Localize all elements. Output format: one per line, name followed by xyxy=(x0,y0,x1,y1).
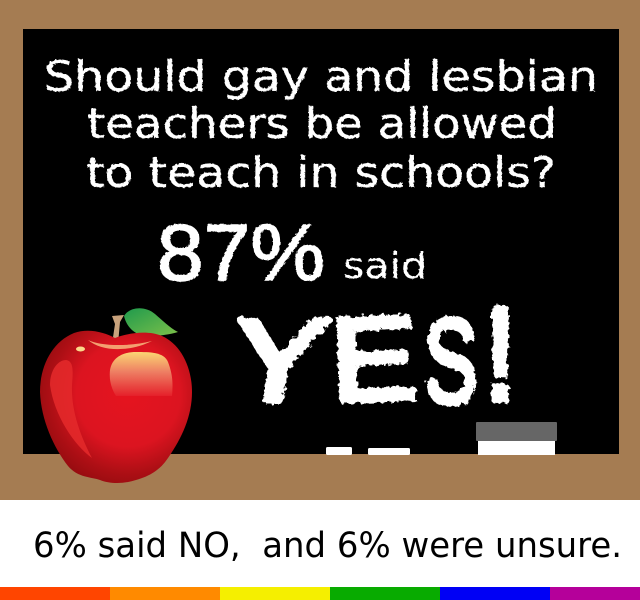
87% said: said xyxy=(343,246,427,287)
apple glossy reflection xyxy=(110,352,173,396)
question heading: to teach in schools? xyxy=(86,148,556,197)
chalkboard xyxy=(23,29,619,454)
eraser xyxy=(476,422,557,455)
apple body xyxy=(40,331,192,483)
YES!: ! xyxy=(484,281,517,428)
footer text: 6% said NO, and 6% were unsure. xyxy=(33,526,622,566)
YES!: S xyxy=(424,294,478,429)
bottom white band xyxy=(0,500,640,587)
87% said xyxy=(157,208,427,297)
apple left highlight xyxy=(50,360,92,458)
question heading: teachers be allowed xyxy=(87,99,557,148)
question heading: Should gay and lesbian xyxy=(44,52,598,101)
YES!: Y xyxy=(222,295,335,426)
apple small highlight xyxy=(76,346,85,352)
question heading xyxy=(44,52,598,197)
apple leaf xyxy=(124,308,178,336)
YES! xyxy=(222,281,517,429)
chalk pieces xyxy=(326,447,410,455)
icon: apple xyxy=(40,308,192,483)
apple stem xyxy=(112,315,124,344)
apple top rim xyxy=(88,340,152,349)
87% said: 87% xyxy=(157,208,325,297)
rainbow stripe xyxy=(0,587,640,600)
YES!: E xyxy=(328,292,419,427)
